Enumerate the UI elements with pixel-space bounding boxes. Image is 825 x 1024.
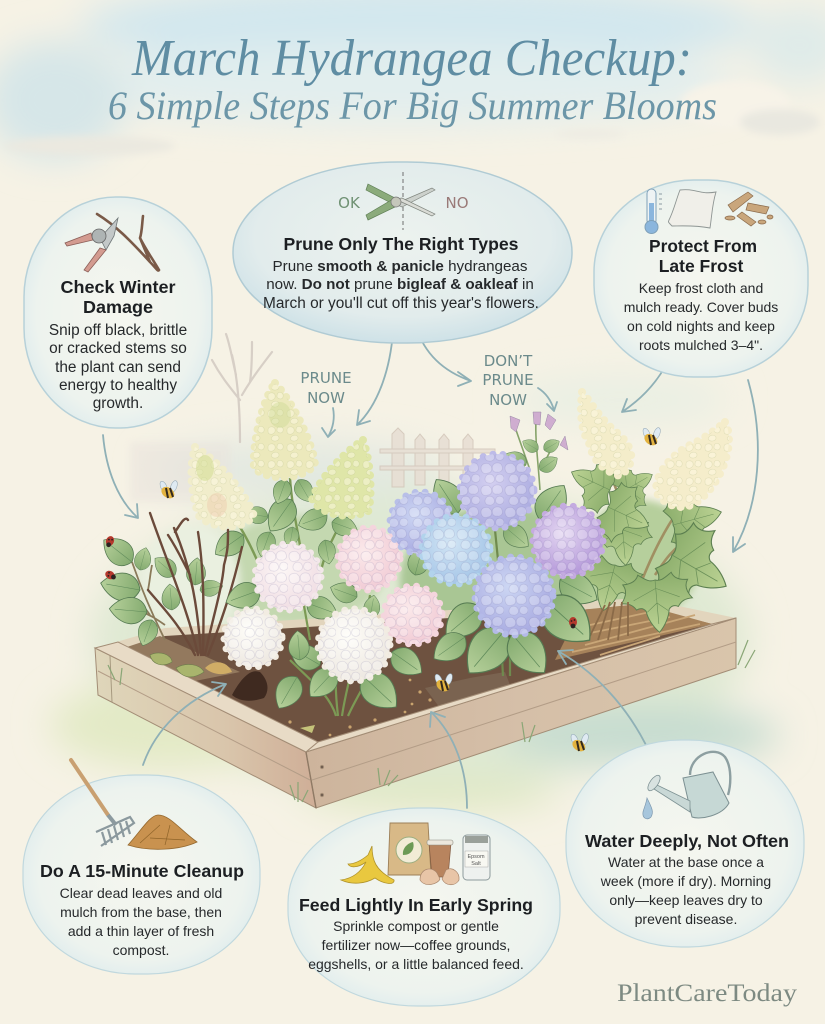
foliage mass behind plants <box>140 500 700 655</box>
label: prune now <box>300 369 352 407</box>
body text: fertilizer now—coffee grounds, <box>322 937 510 953</box>
hydrangea flower: white small <box>224 609 282 667</box>
raised bed: wooden frame <box>95 618 736 808</box>
icon: eggshells <box>420 869 459 885</box>
arrow: water to base <box>558 650 655 765</box>
icon: rake and leaves <box>71 760 197 849</box>
hydrangea flower: pink small <box>384 586 442 644</box>
heading: Protect From <box>649 236 757 256</box>
bare shrub with winter stems <box>96 513 242 677</box>
title <box>108 30 717 128</box>
grass tufts <box>108 640 755 802</box>
body text: mulch from the base, then <box>60 904 222 920</box>
hydrangea flower: purple <box>533 506 603 576</box>
hydrangea flower: lilac top <box>460 454 534 528</box>
oakleaf flower: right <box>656 422 729 507</box>
icon: thermometer <box>645 189 662 234</box>
body text <box>60 885 222 958</box>
body text: or cracked stems so <box>49 340 187 357</box>
garden background wash <box>50 376 780 811</box>
heading: Check Winter <box>60 277 176 297</box>
icon: shears with OK and NO: NO <box>445 194 469 212</box>
body text: now. Do not prune bigleaf & oakleaf in <box>266 276 534 293</box>
icon: wood chips <box>725 192 773 226</box>
panel: do a 15-minute cleanup <box>23 760 260 974</box>
oakleaf flower: left <box>581 392 631 476</box>
hydrangea flower: white-pink left <box>255 544 321 610</box>
label: don't prune now: DON’T <box>484 352 533 370</box>
body text: add a thin layer of fresh <box>68 923 214 939</box>
body text: Snip off black, brittle <box>49 322 187 339</box>
body text: growth. <box>93 395 143 412</box>
hydrangea flower: periwinkle left <box>390 492 452 554</box>
arrow: winter damage to shrub <box>103 435 138 518</box>
body text <box>263 258 539 312</box>
icon: pruners and branch <box>65 214 159 272</box>
body text: Prune smooth & panicle hydrangeas <box>273 258 528 275</box>
body text <box>49 322 187 412</box>
background fence <box>380 428 495 487</box>
body text <box>600 854 771 927</box>
panicle flower: left <box>191 447 254 527</box>
hydrangea flower: periwinkle large <box>475 557 553 635</box>
arrow: small prune now <box>322 408 335 437</box>
heading: Do A 15-Minute Cleanup <box>40 861 244 881</box>
body text: Keep frost cloth and <box>639 280 763 296</box>
icon: epsom jar: Epsom <box>467 854 485 860</box>
icon: shears with OK and NO: OK <box>338 194 361 212</box>
panel: water deeply, not often <box>566 740 804 947</box>
logo: PlantCareToday: PlantCareToday <box>617 980 798 1007</box>
heading line 2: Late Frost <box>659 256 743 276</box>
bare background tree <box>212 334 272 442</box>
panicle flower: right <box>312 440 371 516</box>
heading: Water Deeply, Not Often <box>585 831 789 851</box>
hydrangea flower: white large <box>318 609 390 681</box>
heading line 2: Damage <box>83 297 153 317</box>
arrow: cleanup to soil <box>143 682 226 765</box>
body text: Water at the base once a <box>608 854 764 870</box>
body text: prevent disease. <box>635 911 737 927</box>
smooth hydrangea plants: stems and leaves <box>222 544 432 718</box>
body text: Sprinkle compost or gentle <box>333 918 499 934</box>
icon: compost bag <box>388 823 431 875</box>
body text <box>624 280 778 353</box>
label: don't prune now <box>482 352 534 409</box>
panel: protect from late frost <box>594 180 808 377</box>
body text: March or you'll cut off this year's flowers. <box>263 295 539 312</box>
icon: frost cloth <box>668 190 716 228</box>
raised bed: soil and mulch <box>95 598 736 760</box>
body text: energy to healthy <box>59 377 177 394</box>
hydrangea flower: pink back <box>338 528 400 590</box>
arrow: small don't prune now <box>538 388 557 411</box>
panel: check winter damage <box>24 197 212 428</box>
body text: mulch ready. Cover buds <box>624 299 778 315</box>
label: don't prune now: PRUNE <box>482 371 534 389</box>
arrow: do not prune <box>416 327 471 386</box>
body text: Clear dead leaves and old <box>60 885 222 901</box>
bigleaf hydrangea plants: leaves <box>425 472 604 685</box>
bugs: bees and ladybugs <box>104 427 662 754</box>
title: March Hydrangea Checkup: <box>131 30 692 87</box>
arrow: prune now <box>357 332 393 425</box>
body text <box>308 918 524 972</box>
bigleaf buds <box>502 412 568 490</box>
body text: compost. <box>113 942 169 958</box>
icon: watering can <box>643 752 730 819</box>
title: 6 Simple Steps For Big Summer Blooms <box>108 83 717 128</box>
panel: prune only the right types <box>233 162 572 343</box>
panicle hydrangea plants: stems and leaves <box>209 476 361 595</box>
icon: epsom jar: Salt <box>471 861 481 867</box>
icon: coffee cup <box>427 840 453 877</box>
arrow: feed to soil <box>430 712 467 808</box>
body text: eggshells, or a little balanced feed. <box>308 956 524 972</box>
label: don't prune now: NOW <box>489 391 527 409</box>
arrow: frost to oakleaf side <box>733 380 758 552</box>
hydrangea flower: blue <box>422 516 490 584</box>
icon: banana peel <box>341 846 394 884</box>
panicle flower: middle <box>254 383 315 477</box>
heading: Feed Lightly In Early Spring <box>299 895 533 915</box>
body text: only—keep leaves dry to <box>609 892 763 908</box>
icon: epsom jar <box>463 835 490 880</box>
arrow: protect from frost to oakleaf <box>622 365 666 412</box>
label: prune now: PRUNE <box>300 369 352 387</box>
body text: the plant can send <box>55 359 181 376</box>
body text: roots mulched 3–4". <box>639 337 763 353</box>
body text: week (more if dry). Morning <box>600 873 771 889</box>
body text: on cold nights and keep <box>627 318 775 334</box>
label: prune now: NOW <box>307 389 345 407</box>
heading: Prune Only The Right Types <box>284 234 519 254</box>
panel: feed lightly in early spring <box>288 808 560 1006</box>
oakleaf hydrangea plants: stems and leaves <box>559 446 747 640</box>
icon: shears with OK and NO <box>338 172 469 230</box>
